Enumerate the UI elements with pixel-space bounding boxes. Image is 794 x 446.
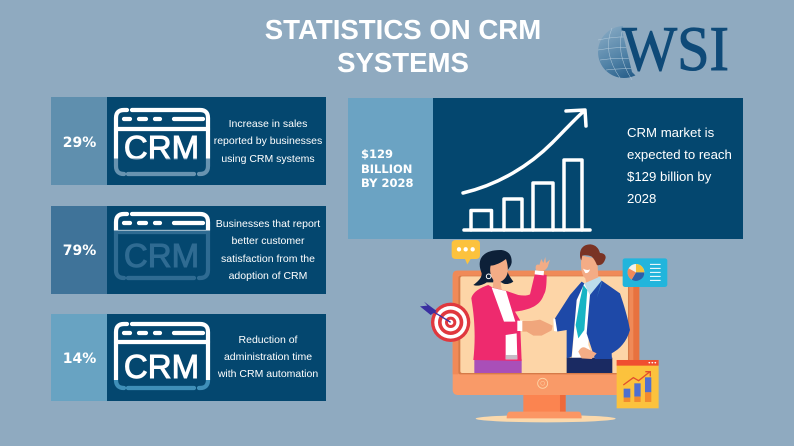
raised hand — [536, 257, 550, 271]
panel: 14% administration time — [51, 314, 326, 401]
description: $129 billion by — [627, 169, 712, 184]
stat tab: 14% — [51, 314, 107, 401]
monitor — [453, 271, 639, 395]
icon: growth bar chart — [463, 110, 590, 230]
description: CRM market is — [627, 125, 715, 140]
monitor stand — [507, 394, 582, 418]
icon: CRM window: CRM — [124, 237, 199, 274]
bubble: speech — [452, 240, 480, 264]
panel: market forecast — [348, 98, 743, 239]
face and neck — [581, 256, 598, 285]
description: using CRM systems — [221, 153, 315, 165]
description: Increase in sales — [229, 118, 307, 130]
logo: WSI: WSI — [622, 13, 729, 84]
icon: CRM window — [116, 110, 208, 174]
card: pie chart — [623, 258, 667, 287]
cuff — [553, 318, 557, 332]
trousers — [567, 358, 612, 373]
icon: CRM window — [116, 324, 208, 388]
man — [553, 244, 630, 373]
stat tab: 14%: 14% — [63, 351, 96, 367]
illustration: handshake on monitor — [420, 240, 667, 422]
earring — [486, 274, 491, 279]
stat tab: 29%: 29% — [63, 135, 96, 151]
hand on waist — [578, 347, 597, 359]
description: Reduction of — [239, 334, 298, 346]
target with arrow — [420, 302, 470, 342]
card: bar chart — [617, 360, 659, 408]
description: with CRM automation — [217, 368, 318, 380]
title: SYSTEMS — [337, 47, 469, 78]
description: reported by businesses — [214, 135, 322, 147]
description: adoption of CRM — [229, 270, 307, 282]
stat tab: $129 billion: BILLION — [361, 162, 412, 176]
hair — [473, 250, 513, 286]
shirt — [492, 288, 517, 359]
floor shadow — [476, 415, 616, 422]
description: satisfaction from the — [221, 253, 315, 265]
description — [627, 125, 732, 206]
logo: WSI — [598, 26, 728, 80]
jacket — [471, 273, 547, 361]
face and neck — [490, 259, 508, 290]
hair — [580, 244, 606, 265]
title: STATISTICS ON CRM — [265, 14, 541, 45]
jacket left side and sleeve — [555, 282, 584, 358]
panel: 29% increase in sales — [51, 97, 326, 185]
icon: CRM window — [116, 214, 208, 278]
description — [214, 118, 322, 165]
description: Businesses that report — [216, 218, 320, 230]
shirt — [572, 283, 593, 358]
description: administration time — [224, 351, 312, 363]
description: expected to reach — [627, 147, 732, 162]
stat tab: $129 billion: $129 — [361, 147, 393, 161]
description: 2028 — [627, 191, 656, 206]
collar — [584, 277, 602, 295]
description: better customer — [232, 235, 305, 247]
stat tab: 29% — [51, 97, 107, 185]
stat tab: $129 billion: BY 2028 — [361, 176, 413, 190]
handshake — [522, 320, 553, 336]
skirt — [474, 359, 522, 373]
description — [217, 334, 318, 380]
infographic canvas — [51, 20, 743, 422]
icon: CRM window: CRM — [124, 129, 199, 166]
tie — [576, 285, 587, 338]
icon: CRM window: CRM — [124, 348, 199, 385]
stat tab: $129 billion — [348, 98, 433, 239]
description — [216, 218, 320, 282]
smile — [583, 269, 590, 273]
jacket right side — [587, 281, 630, 359]
woman — [471, 250, 550, 373]
title — [265, 14, 541, 78]
cuffs — [535, 270, 544, 275]
panel: 79% customer satisfaction — [51, 206, 326, 294]
stat tab: 79%: 79% — [63, 243, 96, 259]
stat tab: 79% — [51, 206, 107, 294]
